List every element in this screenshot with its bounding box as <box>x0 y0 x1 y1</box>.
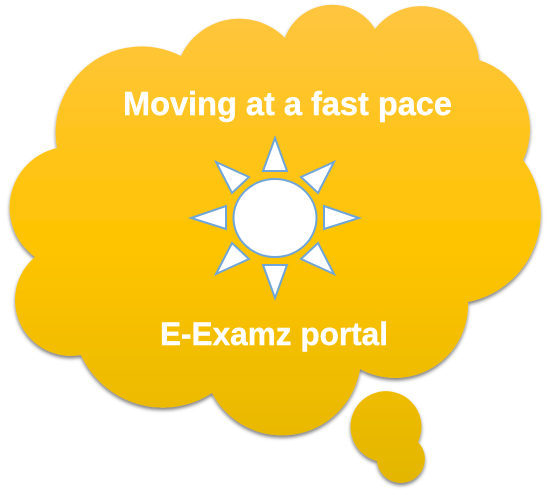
sun ray: bottom right <box>301 243 334 274</box>
sun ray: right <box>324 206 359 229</box>
sun disc <box>234 179 316 257</box>
sun ray: bottom <box>263 265 287 298</box>
label: e-examz portal: E-Examz portal <box>160 316 388 352</box>
icon: sun <box>191 138 359 298</box>
sun ray: left <box>191 206 226 229</box>
sun ray: top left <box>216 162 249 193</box>
sun ray: top <box>263 138 287 171</box>
thought bubble tail <box>350 391 425 483</box>
heading: moving at a fast pace: Moving at a fast pace <box>123 85 452 122</box>
sun ray: bottom left <box>216 243 249 274</box>
sun ray: top right <box>301 162 334 193</box>
